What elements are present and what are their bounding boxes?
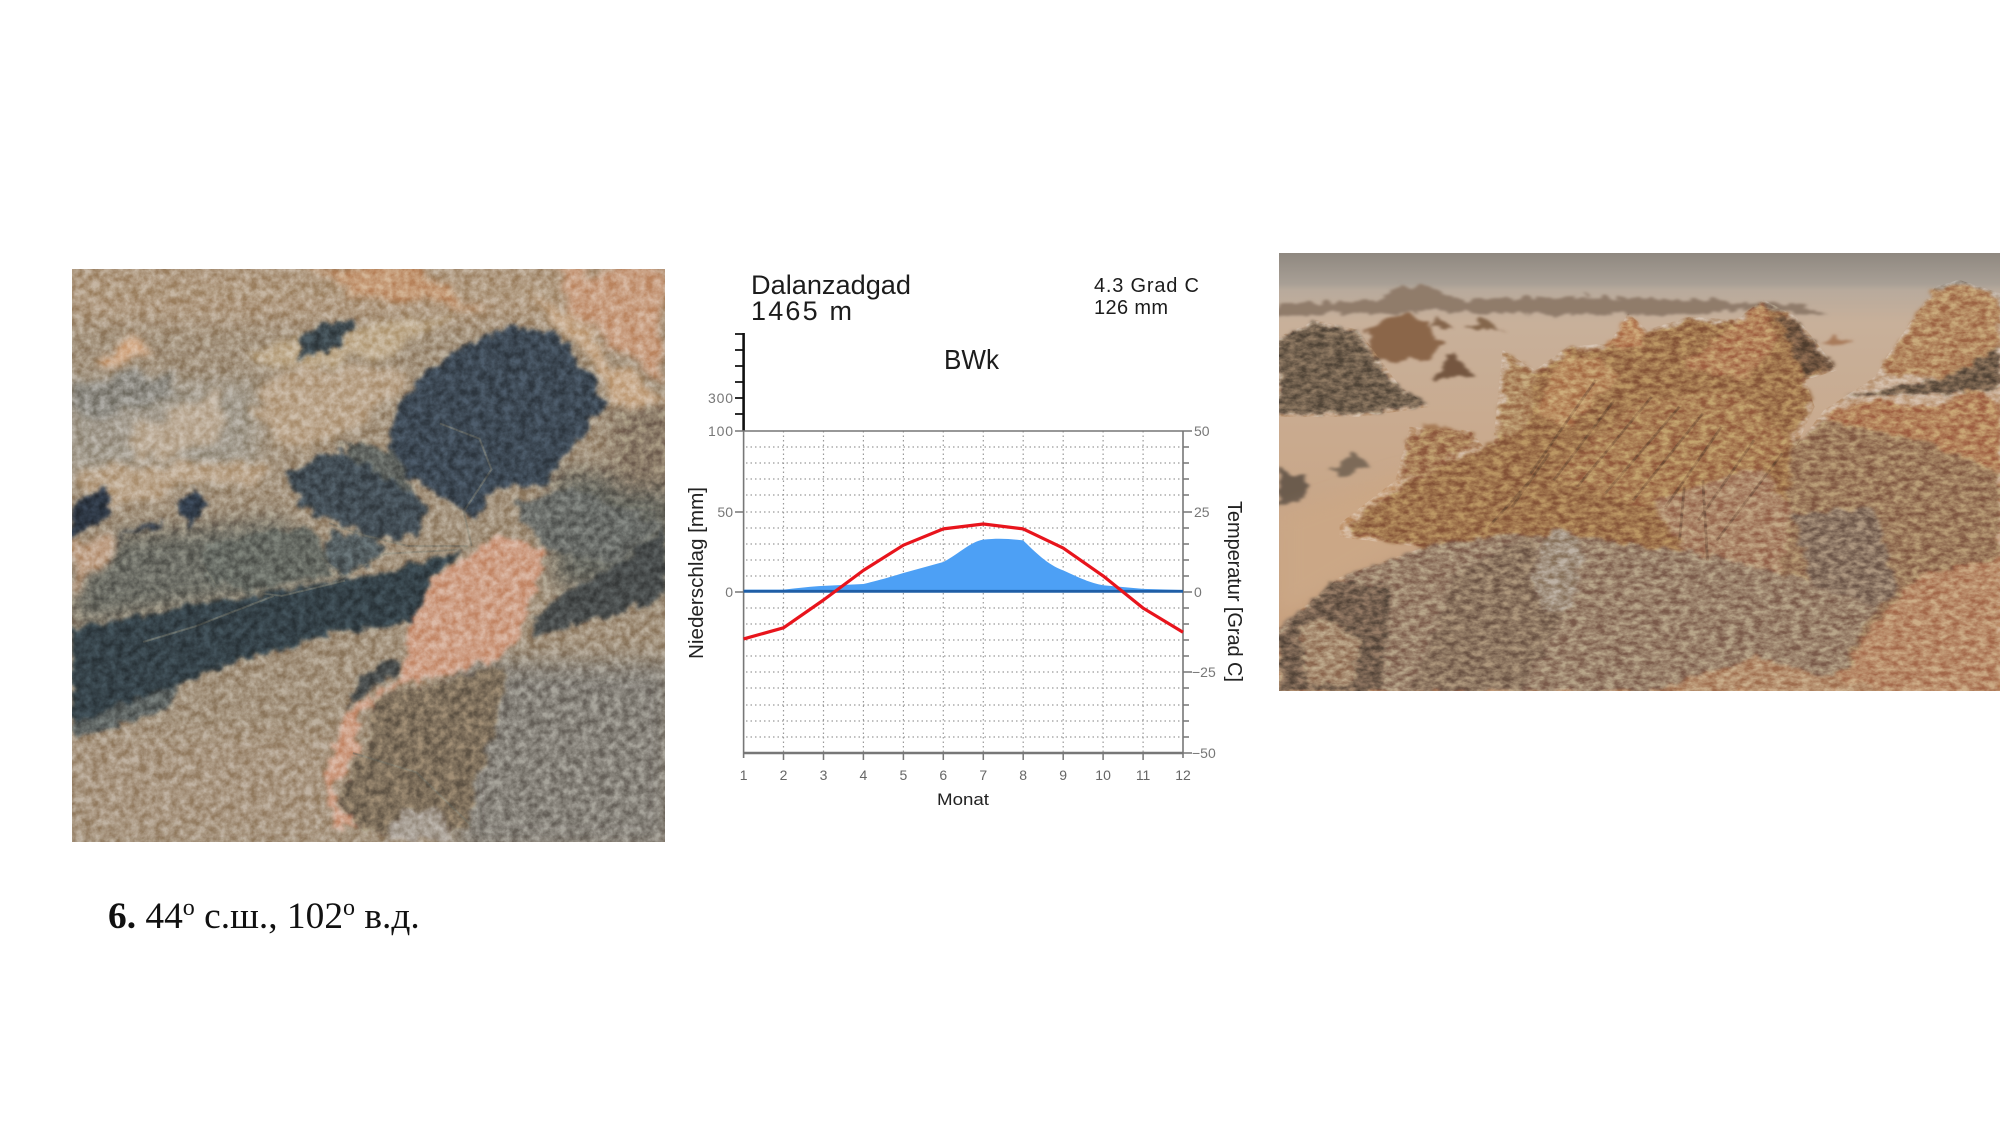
far rock field: [1279, 286, 1850, 507]
right axis labels: [1192, 423, 1216, 761]
month labels: 3: [820, 767, 828, 783]
main ridge: [1279, 283, 2000, 691]
left axis labels: 50: [717, 504, 733, 520]
chart summary: mean temperature and precipitation: [1094, 275, 1199, 319]
chart title: station and altitude: Dalanzadgad: [751, 270, 911, 300]
month labels: 12: [1175, 767, 1191, 783]
month labels: [740, 767, 1191, 783]
precipitation area: [744, 539, 1183, 591]
x axis title: Monat: [937, 790, 989, 809]
left axis labels: 300: [708, 390, 733, 406]
month labels: 1: [740, 767, 748, 783]
temperature curve: [744, 524, 1183, 639]
chart frame and axes: [735, 431, 1192, 760]
panel: desert rock photo: [1279, 253, 2000, 691]
month labels: 8: [1019, 767, 1027, 783]
panel: satellite image: [72, 269, 665, 842]
strata streaks: [1489, 380, 1782, 560]
left axis labels: 0: [725, 584, 733, 600]
right axis labels: −50: [1192, 745, 1216, 761]
upper precipitation scale: [735, 333, 744, 431]
caption: coordinates: 6. 44o с.ш., 102o в.д.: [108, 895, 420, 937]
right axis labels: 50: [1194, 423, 1210, 439]
month labels: 11: [1136, 767, 1151, 783]
climate class label: BWk: [944, 344, 1000, 375]
month labels: 9: [1059, 767, 1067, 783]
drainage lines: [143, 423, 491, 826]
chart title: station and altitude: [751, 270, 911, 326]
right axis labels: 25: [1194, 504, 1210, 520]
month labels: 4: [860, 767, 868, 783]
chart summary: mean temperature and precipitation: 126 mm: [1094, 297, 1168, 319]
right axis labels: −25: [1192, 664, 1216, 680]
month labels: 6: [939, 767, 947, 783]
left axis title: Niederschlag [mm]: [686, 487, 708, 659]
fan and lake: [325, 533, 546, 842]
month labels: 5: [900, 767, 908, 783]
broad colour regions: [60, 259, 693, 853]
right axis labels: 0: [1194, 584, 1202, 600]
month labels: 2: [780, 767, 788, 783]
sand slope: [1279, 460, 1465, 617]
climate chart: Dalanzadgad: [686, 270, 1245, 809]
right axis title: Temperatur [Grad C]: [1223, 501, 1245, 682]
chart title: station and altitude: 1465 m: [751, 296, 852, 326]
zero line: [744, 590, 1183, 593]
left axis labels: 100: [708, 423, 733, 439]
month labels: 10: [1095, 767, 1111, 783]
chart summary: mean temperature and precipitation: 4.3 Grad C: [1094, 275, 1199, 297]
dark massif: [72, 320, 665, 742]
left axis labels: [708, 390, 733, 600]
month labels: 7: [979, 767, 987, 783]
